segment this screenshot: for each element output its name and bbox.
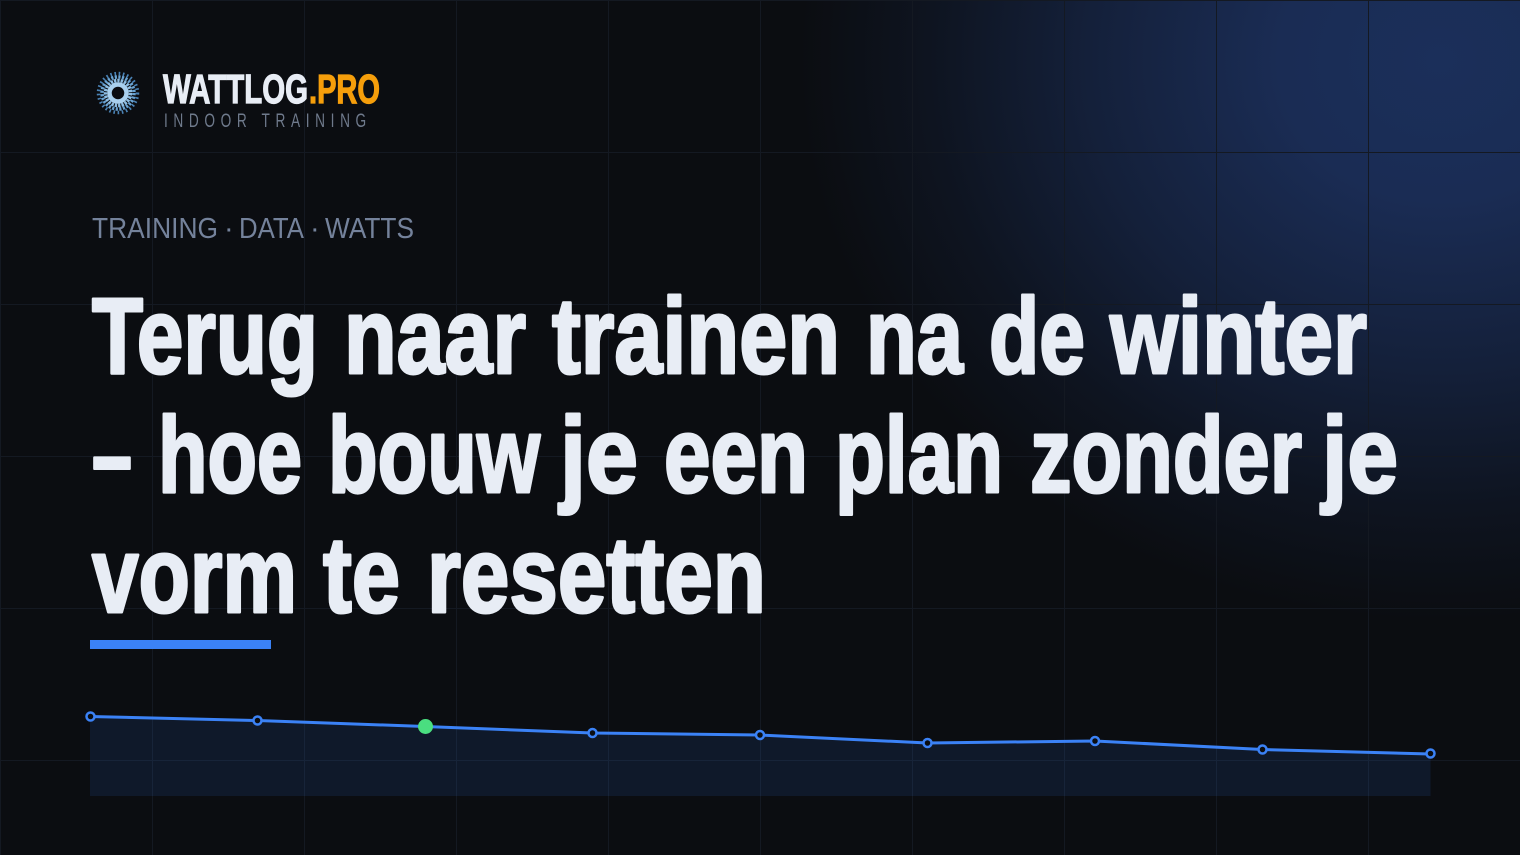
eyebrow: topic tags: · xyxy=(310,213,320,245)
title: zonder xyxy=(1030,394,1302,515)
title: je xyxy=(558,394,638,515)
title xyxy=(92,275,1398,635)
eyebrow: topic tags: · xyxy=(224,213,234,245)
eyebrow: topic tags xyxy=(92,213,414,245)
title: naar xyxy=(344,275,526,396)
title: Terug xyxy=(92,275,318,396)
title: een xyxy=(664,394,808,515)
title: winter xyxy=(1109,275,1367,396)
title: vorm xyxy=(92,514,297,635)
eyebrow: topic tags: WATTS xyxy=(325,213,414,245)
eyebrow: topic tags: DATA xyxy=(239,213,305,245)
title: je xyxy=(1320,394,1398,515)
title: resetten xyxy=(427,514,766,635)
title: na xyxy=(866,275,964,396)
title accent underline xyxy=(90,640,271,649)
title: bouw xyxy=(328,394,541,515)
highlighted marker xyxy=(418,719,433,734)
chart area fill xyxy=(90,716,1430,796)
title: – xyxy=(92,394,132,515)
brand wordmark: WATTLOG xyxy=(163,66,308,112)
brand wordmark: .PRO xyxy=(309,66,380,112)
title: trainen xyxy=(552,275,840,396)
title: plan xyxy=(835,394,1003,515)
title: te xyxy=(323,514,400,635)
title: de xyxy=(989,275,1085,396)
chart line xyxy=(90,716,1430,754)
chart markers xyxy=(86,712,1434,758)
icon: cassette gear logo xyxy=(98,74,138,112)
eyebrow: topic tags: TRAINING xyxy=(92,213,218,245)
brand tagline: INDOOR TRAINING xyxy=(164,110,372,132)
line chart: declining watts trend xyxy=(86,712,1434,796)
title: hoe xyxy=(158,394,302,515)
